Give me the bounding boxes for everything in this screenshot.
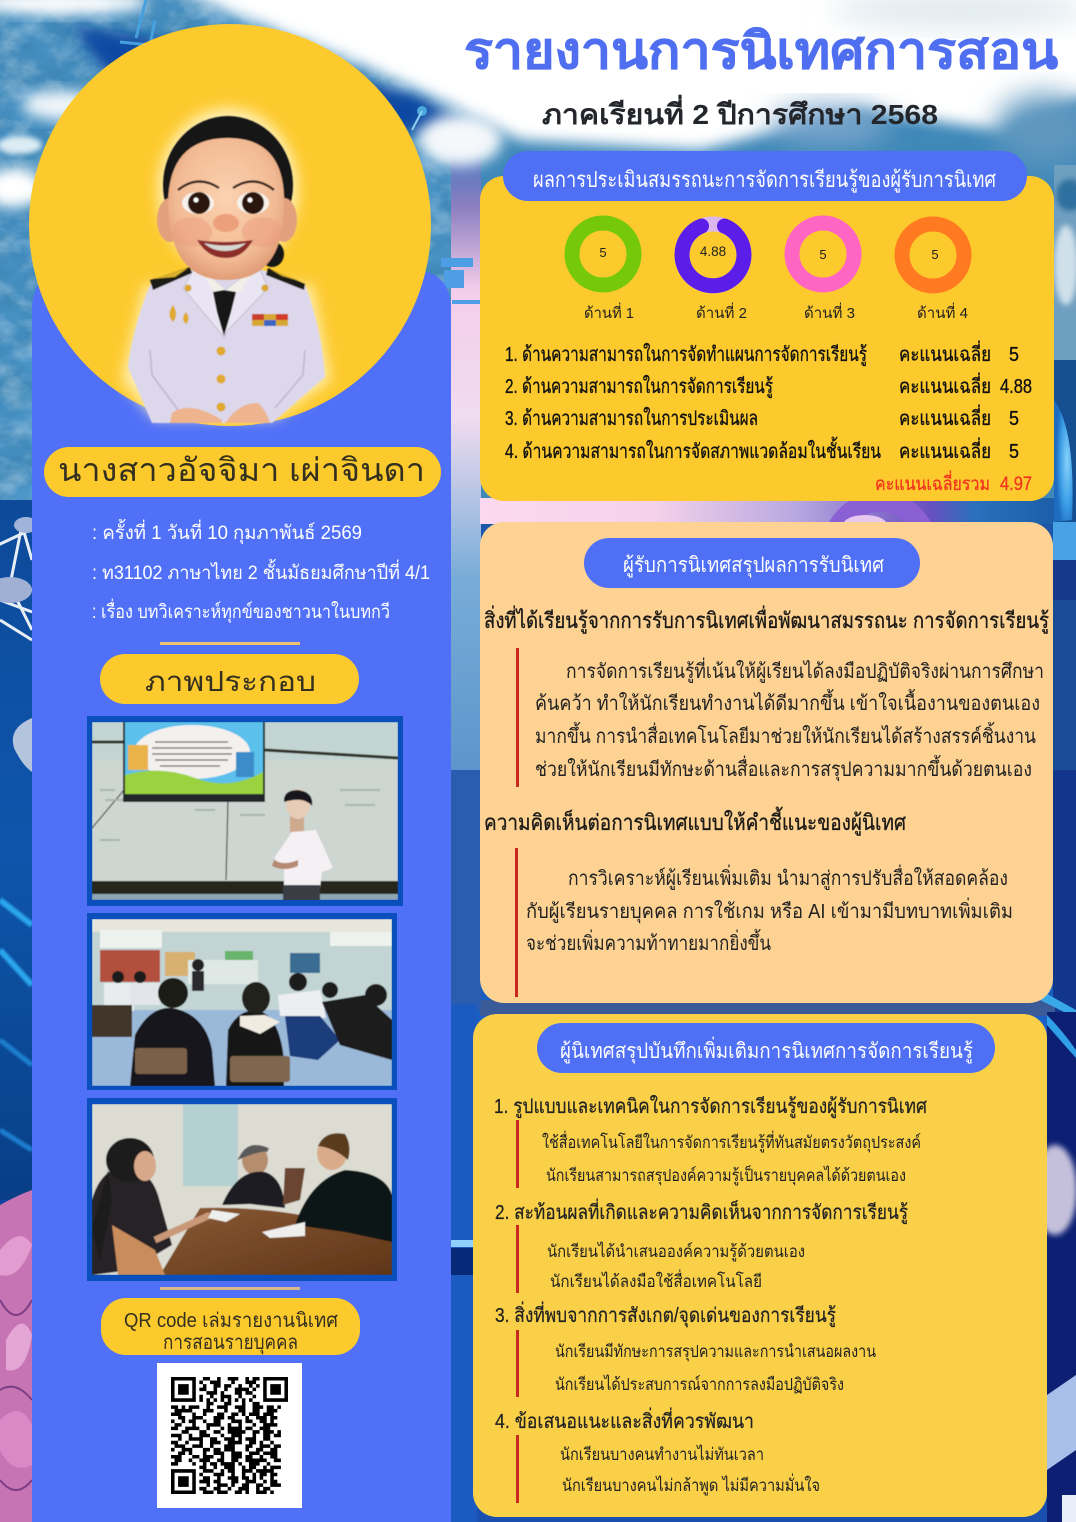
- note 4: 4. ข้อเสนอแนะและสิ่งที่ควรพัฒนา: [495, 1407, 754, 1433]
- donut labels: ด้านที่ 2: [696, 302, 747, 322]
- profile portrait on yellow circle: [29, 24, 431, 426]
- donut chart 4: [902, 224, 964, 286]
- QR code heading pill: การสอนรายบุคคล: [163, 1332, 298, 1355]
- panel: supervisee summary: [480, 522, 1053, 1003]
- note 2: [495, 1198, 908, 1293]
- score list: 4.88: [1000, 376, 1032, 398]
- QR code: [157, 1363, 302, 1508]
- donut chart 1: [572, 223, 634, 285]
- text block: lesson details: : เรื่อง บทวิเคราะห์ทุกข์ของชาวนาในบทกวี: [92, 598, 390, 624]
- donut chart 3: [792, 223, 854, 285]
- note 4: นักเรียนบางคนไม่กล้าพูด ไม่มีความมั่นใจ: [562, 1473, 820, 1496]
- panel header pill: [584, 538, 920, 588]
- student in white shirt: [272, 789, 333, 901]
- QR code heading pill: QR code เล่มรายงานนิเทศ: [124, 1310, 338, 1332]
- photo 3: post-observation meeting at a table: [87, 1098, 397, 1281]
- photo 1: student presenting in front of a screen: [87, 716, 403, 906]
- note 3: [495, 1301, 876, 1397]
- score list: [505, 340, 1032, 463]
- donut chart 4: 5: [931, 247, 939, 262]
- note 3: นักเรียนมีทักษะการสรุปความและการนำเสนอผลงาน: [555, 1342, 876, 1362]
- name pill: [44, 447, 441, 497]
- donut labels: ด้านที่ 1: [584, 302, 634, 322]
- heading: opinion on coaching: ความคิดเห็นต่อการนิเทศแบบให้คำชี้แนะของผู้นิเทศ: [484, 807, 906, 836]
- panel: supervisor notes: [473, 1014, 1047, 1517]
- note 2: นักเรียนได้นำเสนอองค์ความรู้ด้วยตนเอง: [547, 1241, 805, 1262]
- donut labels: ด้านที่ 4: [917, 302, 968, 322]
- soft white glow behind figure: [122, 108, 330, 418]
- note 1: ใช้สื่อเทคโนโลยีในการจัดการเรียนรู้ที่ทันสมัยตรงวัตถุประสงค์: [542, 1130, 921, 1153]
- score list: คะแนนเฉลี่ย: [899, 404, 991, 430]
- score list: 5: [1009, 441, 1019, 463]
- screen showing a lesson slide: [123, 720, 265, 802]
- blue technology tiles behind panel: [441, 258, 480, 304]
- donut labels: ด้านที่ 3: [804, 302, 855, 322]
- heading pill: illustrations: ภาพประกอบ: [145, 666, 316, 697]
- score list: 4. ด้านความสามารถในการจัดสภาพแวดล้อมในชั้นเรียน: [505, 437, 881, 463]
- score list: 5: [1009, 408, 1019, 430]
- donut chart 1: 5: [599, 245, 607, 260]
- panel header pill: ผู้นิเทศสรุปบันทึกเพิ่มเติมการนิเทศการจัดการเรียนรู้: [560, 1036, 973, 1064]
- overall average score: 4.97: [1000, 474, 1032, 495]
- note 1: 1. รูปแบบและเทคนิคในการจัดการเรียนรู้ของผู้รับการนิเทศ: [494, 1095, 927, 1119]
- figure: jacket: [128, 262, 325, 423]
- note 2: นักเรียนได้ลงมือใช้สื่อเทคโนโลยี: [550, 1269, 762, 1291]
- text block: coaching opinion: [526, 864, 1013, 955]
- donut chart 2: [682, 224, 744, 286]
- QR code heading pill: [101, 1298, 360, 1355]
- note 1: นักเรียนสามารถสรุปองค์ความรู้เป็นรายบุคคลได้ด้วยตนเอง: [546, 1164, 906, 1186]
- panel header pill: [503, 151, 1027, 201]
- score list: คะแนนเฉลี่ย: [899, 437, 991, 463]
- note 4: [495, 1407, 820, 1503]
- text block: lesson details: : ครั้งที่ 1 วันที่ 10 กุมภาพันธ์ 2569: [92, 519, 362, 545]
- note 3: นักเรียนได้ประสบการณ์จากการลงมือปฏิบัติจริง: [555, 1374, 844, 1394]
- network of spheres on the left edge: [0, 517, 32, 1522]
- note 2: 2. สะท้อนผลที่เกิดและความคิดเห็นจากการจัดการเรียนรู้: [495, 1198, 908, 1225]
- score list: คะแนนเฉลี่ย: [899, 372, 991, 398]
- note 3: 3. สิ่งที่พบจากการสังเกต/จุดเด่นของการเรียนรู้: [495, 1301, 836, 1328]
- score list: คะแนนเฉลี่ย: [899, 340, 991, 366]
- text block: coaching opinion: จะช่วยเพิ่มความท้าทายมากยิ่งขึ้น: [526, 929, 771, 955]
- score list: 3. ด้านความสามารถในการประเมินผล: [505, 407, 758, 430]
- note 1: [494, 1095, 927, 1188]
- photo 2: classroom seen from the back: [87, 913, 397, 1090]
- text block: lesson details: : ท31102 ภาษาไทย 2 ชั้นมัธยมศึกษาปีที่ 4/1: [92, 559, 430, 584]
- score list: 5: [1009, 344, 1019, 366]
- panel: left profile column: [29, 24, 451, 1522]
- text block: coaching opinion: การวิเคราะห์ผู้เรียนเพิ่มเติม นำมาสู่การปรับสื่อให้สอดคล้อง: [568, 864, 1008, 891]
- donut labels: [584, 302, 968, 322]
- note 4: นักเรียนบางคนทำงานไม่ทันเวลา: [560, 1444, 764, 1464]
- score list: 1. ด้านความสามารถในการจัดทำแผนการจัดการเรียนรู้: [505, 343, 867, 367]
- donut chart 2: 4.88: [700, 244, 726, 259]
- text block: coaching opinion: กับผู้เรียนรายบุคคล การใช้เกม หรือ AI เข้ามามีบทบาทเพิ่มเติม: [526, 897, 1013, 924]
- score list: 2. ด้านความสามารถในการจัดการเรียนรู้: [505, 375, 773, 399]
- panel header pill: [537, 1023, 995, 1073]
- panel header pill: ผู้รับการนิเทศสรุปผลการรับนิเทศ: [623, 554, 885, 578]
- subtitle: ภาคเรียนที่ 2 ปีการศึกษา 2568: [542, 94, 938, 130]
- text block: learning reflection: [535, 657, 1044, 782]
- panel header pill: ผลการประเมินสมรรถนะการจัดการเรียนรู้ของผู้รับการนิเทศ: [533, 167, 996, 193]
- figure: head and hair: [157, 116, 297, 280]
- donut chart 3: 5: [819, 247, 827, 262]
- title: รายงานการนิเทศการสอน: [464, 23, 1058, 79]
- heading pill: illustrations: [100, 654, 359, 704]
- purple ring between top panels: [829, 501, 930, 522]
- overall average score: คะแนนเฉลี่ยรวม: [875, 470, 990, 495]
- text block: lesson details: [92, 519, 430, 624]
- panel: competency assessment results: [480, 151, 1054, 501]
- name pill: นางสาวอัจจิมา เผ่าจินดา: [58, 452, 425, 488]
